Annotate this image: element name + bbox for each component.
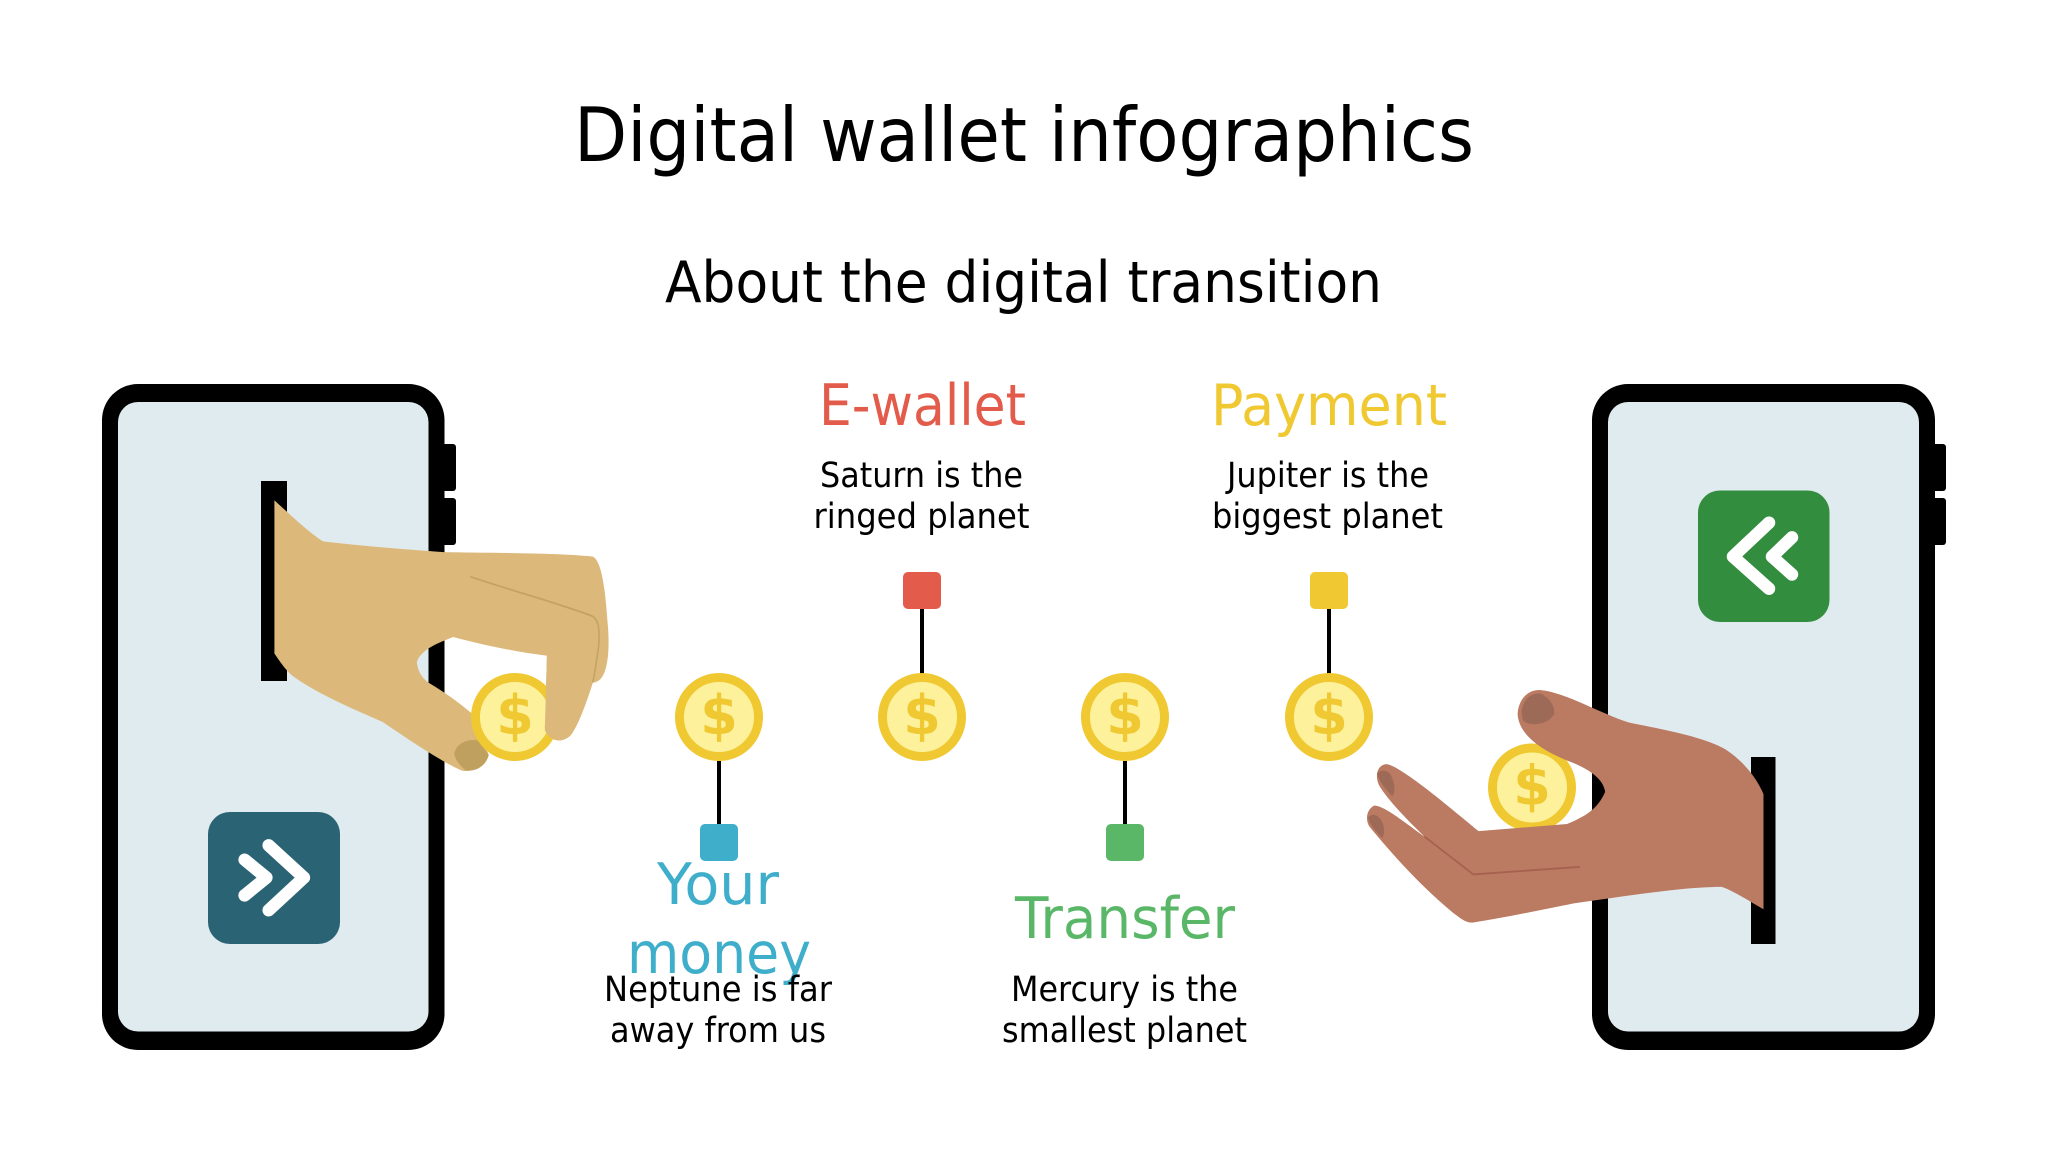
icon: back arrows bbox=[1698, 490, 1830, 622]
icon: forward arrows bbox=[208, 812, 340, 944]
coin at hand bbox=[1492, 748, 1572, 827]
connector bbox=[717, 761, 721, 825]
coin bbox=[680, 678, 758, 756]
heading: money bbox=[627, 921, 811, 987]
coin at hand: $ bbox=[1513, 754, 1551, 818]
description: away from us bbox=[610, 1011, 826, 1051]
description: biggest planet bbox=[1212, 497, 1443, 537]
phone screen bbox=[118, 402, 428, 1032]
phone side buttons bbox=[1926, 444, 1946, 545]
connector bbox=[920, 609, 924, 674]
marker bbox=[700, 824, 738, 861]
fingernails bbox=[1368, 693, 1554, 838]
phone frame bbox=[1592, 384, 1935, 1050]
hand shape bbox=[1367, 690, 1763, 923]
palm crease bbox=[1424, 836, 1580, 874]
heading: E-wallet bbox=[819, 373, 1026, 439]
marker bbox=[1106, 824, 1144, 861]
phone side buttons bbox=[436, 444, 456, 545]
index finger over coin bbox=[545, 656, 593, 740]
heading: Payment bbox=[1211, 373, 1447, 439]
marker bbox=[1310, 572, 1348, 609]
open hand bbox=[1367, 690, 1763, 923]
finger crease bbox=[470, 577, 599, 682]
coin in hand: $ bbox=[496, 684, 534, 747]
description: Neptune is far bbox=[604, 970, 833, 1010]
step: E-wallet bbox=[814, 373, 1030, 756]
coin bbox=[1290, 678, 1368, 756]
hand holding coin bbox=[274, 500, 609, 771]
coin: $ bbox=[1106, 684, 1144, 747]
subtitle: About the digital transition bbox=[665, 250, 1382, 316]
right phone with hand bbox=[1367, 384, 1946, 1050]
coin: $ bbox=[700, 684, 738, 747]
phone screen bbox=[1608, 402, 1919, 1032]
phone slot bbox=[261, 481, 287, 681]
description: Saturn is the bbox=[820, 456, 1023, 496]
step: Transfer bbox=[1002, 678, 1247, 1051]
marker bbox=[903, 572, 941, 609]
description: ringed planet bbox=[814, 497, 1030, 537]
connector bbox=[1123, 761, 1127, 825]
coin bbox=[882, 678, 962, 756]
phone slot bbox=[1751, 757, 1776, 944]
description: smallest planet bbox=[1002, 1011, 1247, 1051]
title: Digital wallet infographics bbox=[574, 91, 1474, 179]
coin bbox=[1086, 678, 1164, 756]
heading: Transfer bbox=[1014, 886, 1236, 952]
coin in hand bbox=[476, 678, 554, 756]
description: Jupiter is the bbox=[1225, 456, 1429, 496]
step: Your money bbox=[604, 678, 833, 1051]
coin: $ bbox=[1310, 684, 1348, 747]
thumbnail bbox=[454, 740, 489, 771]
left phone with hand bbox=[102, 384, 609, 1050]
heading: Your bbox=[656, 852, 780, 918]
hand shape bbox=[274, 500, 609, 771]
coin: $ bbox=[903, 684, 941, 747]
description: Mercury is the bbox=[1011, 970, 1238, 1010]
step: Payment bbox=[1211, 373, 1447, 756]
phone frame bbox=[102, 384, 444, 1050]
connector bbox=[1327, 609, 1331, 674]
